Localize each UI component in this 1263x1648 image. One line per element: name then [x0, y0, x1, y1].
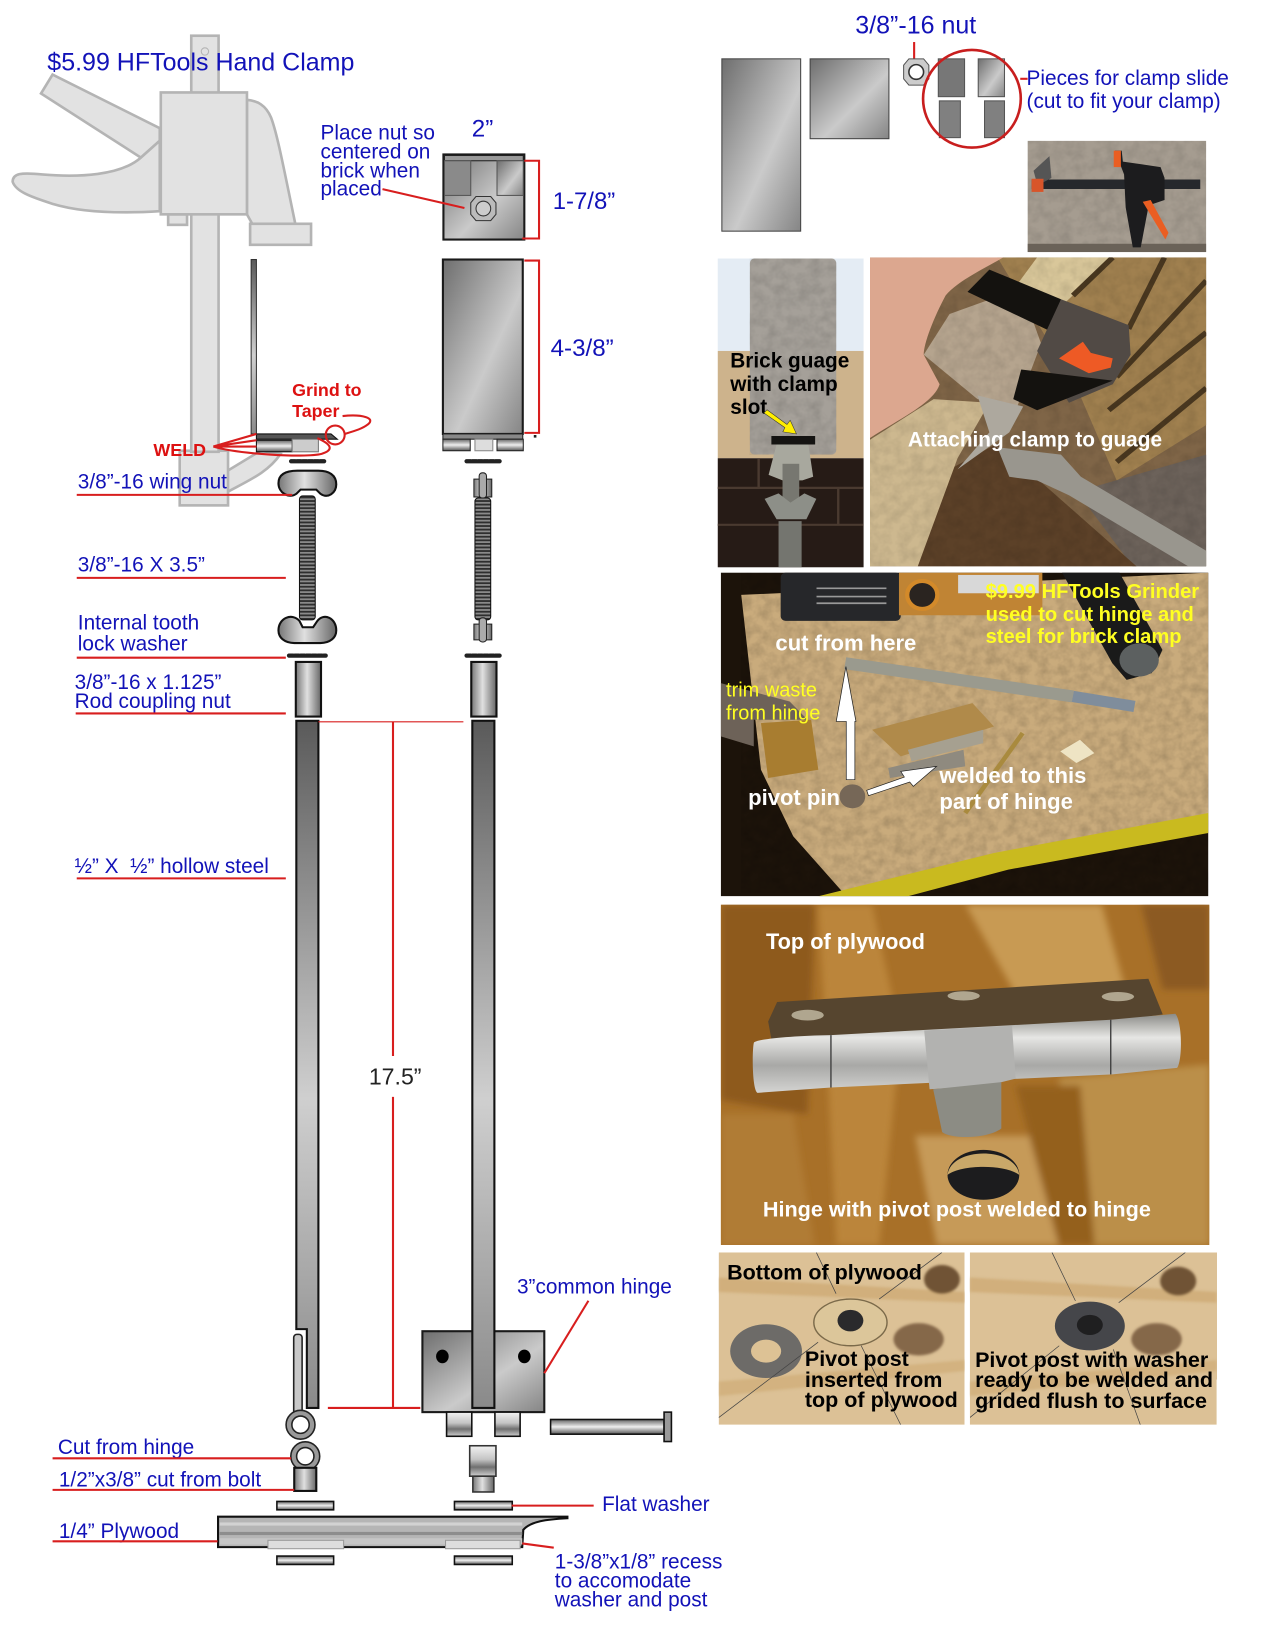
photo: grinder, bolt and hinge on OSB: from hinge — [726, 703, 820, 725]
text: place nut note: brick when — [320, 160, 420, 183]
photo: post with washer: Pivot post with washer — [975, 1348, 1209, 1372]
callout: recess: washer and post — [554, 1588, 708, 1611]
front view: tall plate with feet — [443, 260, 536, 451]
callout: common hinge — [517, 1275, 672, 1373]
photo: grinder, bolt and hinge on OSB: welded to this — [938, 763, 1086, 788]
photo: grinder, bolt and hinge on OSB — [721, 573, 1208, 896]
title: $5.99 HFTools Hand Clamp — [47, 48, 354, 76]
photo: top of plywood with hinge: Hinge with pivot post welded to hinge — [763, 1197, 1151, 1222]
callout: cut from hinge: Cut from hinge — [58, 1436, 194, 1459]
callout: plywood: 1/4” Plywood — [59, 1520, 179, 1543]
annotation: weld and grind to taper: Grind to — [292, 380, 362, 400]
photo: bottom of plywood, washer and post: Pivot post — [805, 1347, 909, 1371]
photo: attaching clamp to gauge — [870, 257, 1206, 566]
side view: welded clamp slide — [251, 260, 337, 452]
photo: grinder, bolt and hinge on OSB: trim waste — [726, 680, 817, 702]
photo: brick gauge with clamp slot: slot — [730, 396, 767, 419]
photo: top of plywood with hinge — [721, 905, 1209, 1245]
dimension: 1-7/8 inch — [522, 161, 615, 239]
photo: bottom of plywood, washer and post: Bottom of plywood — [727, 1261, 922, 1285]
photo: brick gauge with clamp slot — [718, 258, 864, 567]
hinge pin — [551, 1412, 671, 1442]
dimension: 4-3/8 inch: 4-3/8” — [551, 335, 614, 362]
callout: recess: to accomodate — [555, 1570, 691, 1593]
photo: bottom of plywood, washer and post: top of plywood — [805, 1388, 958, 1412]
cut pieces: steel plates — [722, 59, 889, 231]
photo: top of plywood with hinge: Top of plywood — [766, 929, 925, 954]
left assembly: cut hinge and bolt pieces — [277, 1334, 334, 1564]
photo: grinder, bolt and hinge on OSB: $9.99 HFTools Grinder — [986, 581, 1199, 603]
front view: clamp block with nut — [443, 154, 524, 240]
photo: grinder, bolt and hinge on OSB: part of hinge — [939, 789, 1073, 814]
photo: grinder, bolt and hinge on OSB: steel for brick clamp — [986, 626, 1182, 648]
photo: bottom of plywood, washer and post — [719, 1252, 965, 1425]
annotation: weld and grind to taper — [153, 380, 370, 460]
callout: lock washer: lock washer — [78, 632, 188, 655]
callout: wing nut: 3/8”-16 wing nut — [78, 471, 227, 494]
photo: clamp on concrete — [1028, 140, 1206, 252]
callout: lock washer — [77, 611, 286, 658]
text: place nut note: placed — [320, 177, 382, 200]
pivot post and flat washers — [454, 1446, 512, 1564]
left assembly: rod, nuts and washers — [278, 461, 336, 717]
callout: cut from bolt: 1/2”x3/8” cut from bolt — [59, 1469, 261, 1492]
cut pieces: nut and small pieces — [904, 42, 1021, 148]
callout: flat washer: Flat washer — [602, 1493, 710, 1516]
annotation: weld and grind to taper: WELD — [153, 440, 206, 460]
photo: grinder, bolt and hinge on OSB: used to cut hinge and — [986, 604, 1194, 626]
photo: bottom of plywood, washer and post: inserted from — [805, 1368, 942, 1392]
photo: brick gauge with clamp slot: Brick guage — [730, 350, 849, 373]
text: place nut note: Place nut so — [320, 122, 435, 145]
photo: post with washer — [970, 1252, 1217, 1425]
left assembly: hollow steel tube — [296, 721, 318, 1408]
dimension: 2 inch width: 2” — [472, 116, 493, 143]
callout: recess — [522, 1543, 722, 1611]
callout: recess: 1-3/8”x1/8” recess — [555, 1551, 722, 1574]
text: place nut note: centered on — [320, 141, 430, 164]
callout: pieces for clamp slide: (cut to fit your clamp) — [1027, 90, 1221, 113]
photo: grinder, bolt and hinge on OSB: cut from here — [775, 630, 916, 655]
callout: coupling nut — [75, 671, 286, 713]
photo: grinder, bolt and hinge on OSB: pivot pin — [748, 785, 840, 810]
callout: common hinge: 3”common hinge — [517, 1275, 672, 1298]
photo: post with washer: ready to be welded and — [975, 1368, 1213, 1392]
photo: post with washer: grided flush to surface — [975, 1389, 1207, 1413]
photo: brick gauge with clamp slot: with clamp — [729, 373, 838, 396]
illustration: hand clamp outline — [13, 36, 311, 505]
callout: coupling nut: 3/8”-16 x 1.125” — [75, 671, 222, 694]
annotation: weld and grind to taper: Taper — [292, 401, 339, 421]
callout: bolt length: 3/8”-16 X 3.5” — [78, 554, 205, 577]
dimension: 4-3/8 inch — [524, 261, 614, 433]
callout: pieces for clamp slide: Pieces for clamp slide — [1027, 67, 1229, 90]
callout: hollow steel: ½” X ½” hollow steel — [75, 855, 269, 878]
label: nut: 3/8”-16 nut — [855, 12, 976, 40]
callout: pieces for clamp slide — [1020, 67, 1229, 113]
callout: lock washer: Internal tooth — [78, 611, 199, 634]
plywood cross-section — [218, 1517, 567, 1549]
dimension: 17.5 inch: 17.5” — [369, 1063, 422, 1089]
dimension: 1-7/8 inch: 1-7/8” — [553, 188, 615, 215]
photo: attaching clamp to gauge: Attaching clamp to guage — [908, 429, 1162, 452]
callout: coupling nut: Rod coupling nut — [75, 690, 231, 713]
text: place nut note — [320, 122, 464, 208]
right assembly: common hinge with tube — [422, 721, 544, 1436]
right assembly: rod, nuts and washers — [467, 461, 501, 717]
